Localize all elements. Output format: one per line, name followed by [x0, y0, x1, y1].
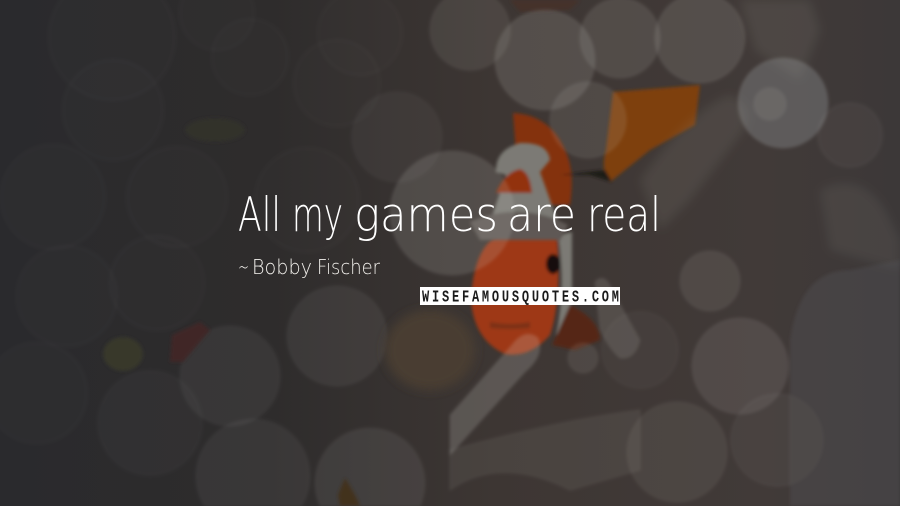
quote text: All — [238, 188, 281, 243]
warm glow left of fish — [385, 310, 475, 390]
author attribution: Bobby — [252, 255, 312, 279]
quote text: are — [507, 188, 576, 243]
pale bulbs and tentacles, bottom right — [450, 251, 900, 506]
dark anemone bulbs, left side — [0, 0, 442, 506]
quote text — [238, 188, 661, 243]
pale anemone bulbs, centre and top right — [390, 0, 882, 275]
quote text: real — [587, 188, 661, 243]
quote text: my — [292, 188, 343, 243]
clownfish white head band — [470, 143, 568, 240]
clownfish lower body — [471, 232, 600, 355]
watermark badge: WISEFAMOUSQUOTES.COM — [422, 289, 619, 307]
author attribution: ~ — [238, 255, 249, 279]
author attribution: Fischer — [317, 255, 381, 279]
quote text: games — [354, 188, 498, 243]
orange fish behind and red body top — [510, 0, 700, 205]
soft tentacles, top right — [640, 0, 900, 270]
author attribution — [238, 255, 381, 279]
warm and lime accents between bulbs — [103, 118, 360, 506]
